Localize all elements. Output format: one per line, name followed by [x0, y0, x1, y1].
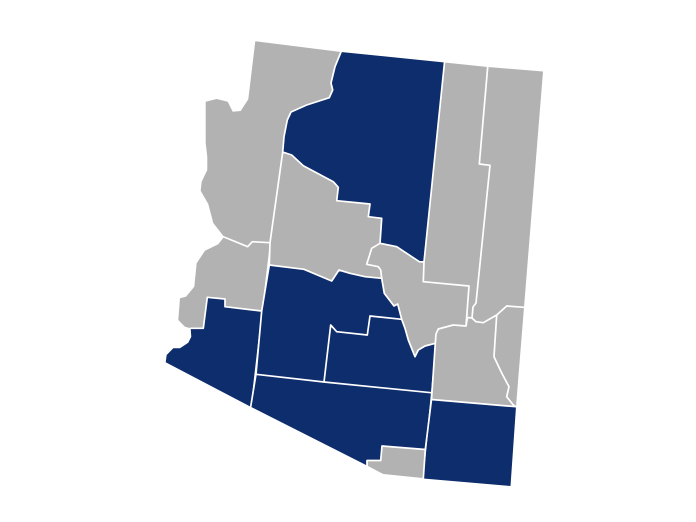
- county: Pima: [251, 374, 431, 466]
- county: Greenlee: [494, 306, 524, 406]
- county: Gila: [367, 243, 469, 357]
- county: Pinal: [324, 316, 435, 393]
- county: Mohave: [201, 41, 341, 247]
- county: Santa Cruz: [368, 446, 425, 478]
- county borders: [191, 52, 524, 478]
- county: Coconino: [283, 52, 444, 262]
- county: Yavapai: [269, 152, 382, 281]
- county: La Paz: [178, 237, 270, 328]
- county: Navajo: [423, 62, 490, 318]
- county: Graham: [432, 315, 516, 407]
- county: Maricopa: [256, 265, 402, 382]
- county: Yuma: [166, 297, 262, 407]
- county: Apache: [472, 67, 543, 323]
- county: Cochise: [423, 400, 516, 486]
